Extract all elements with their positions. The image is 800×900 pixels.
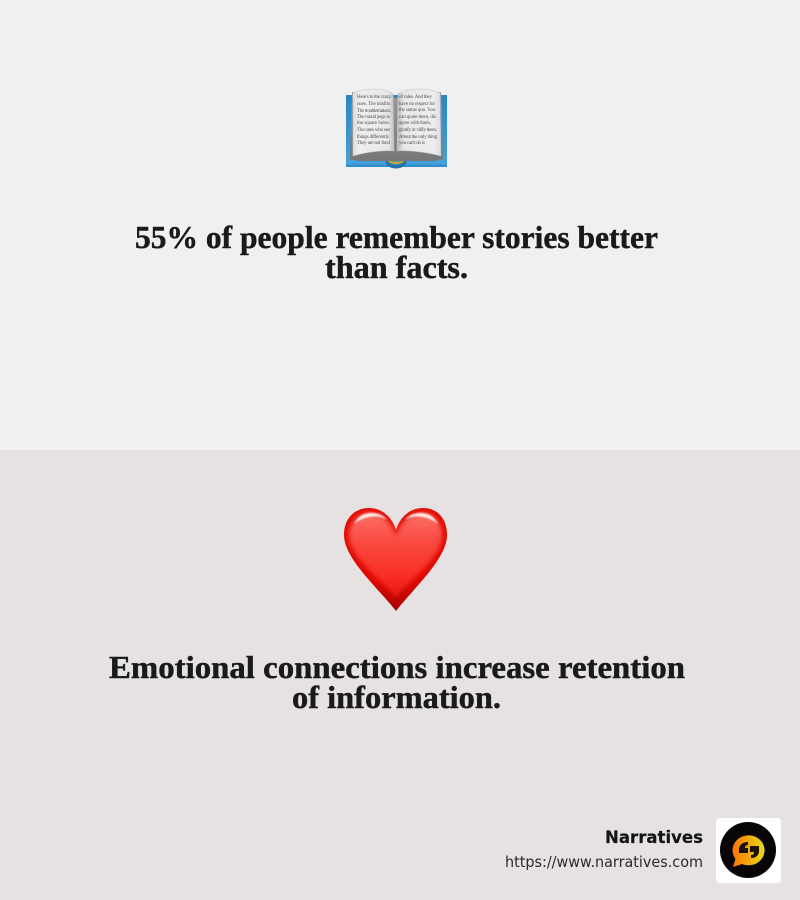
icon: open book: have no respect for	[399, 102, 435, 107]
icon: open book: The ones who see	[357, 128, 391, 133]
icon: open book: can quote them, dis	[399, 115, 436, 120]
icon: open book: The round pegs in	[357, 115, 390, 120]
heading: stories statistic: than facts.	[325, 249, 468, 285]
icon: open book: Here's to the crazy	[357, 95, 392, 100]
icon: open book: The troublemakers.	[357, 109, 391, 114]
heading: emotional connections: Emotional connections increase retention	[109, 649, 685, 685]
icon: open book: About the only thing	[399, 135, 438, 140]
icon: open book: agree with them,	[399, 121, 431, 126]
icon: open book: things differently.	[357, 135, 390, 140]
heading: stories statistic: 55% of people remember stories better	[135, 219, 658, 255]
icon: narratives logo	[716, 818, 781, 883]
brand name: Narratives	[605, 828, 703, 848]
panel: top background	[0, 0, 800, 450]
icon: open book: you can't do is	[399, 141, 425, 146]
icon: open book: of rules. And they	[399, 95, 432, 100]
icon: open book	[346, 89, 447, 168]
icon: open book: ones. The misfits.	[357, 102, 391, 107]
icon: red heart	[344, 508, 447, 611]
heading: emotional connections	[109, 649, 685, 715]
heading: stories statistic	[135, 219, 658, 285]
icon: open book: the square holes.	[357, 121, 390, 126]
icon: open book: glorify or vilify them.	[399, 128, 437, 133]
icon: open book: the status quo. You	[399, 108, 436, 113]
heading: emotional connections: of information.	[292, 679, 501, 715]
icon: open book: They are not fond	[357, 141, 390, 146]
brand url: https://www.narratives.com	[505, 853, 703, 871]
panel: bottom background	[0, 450, 800, 900]
